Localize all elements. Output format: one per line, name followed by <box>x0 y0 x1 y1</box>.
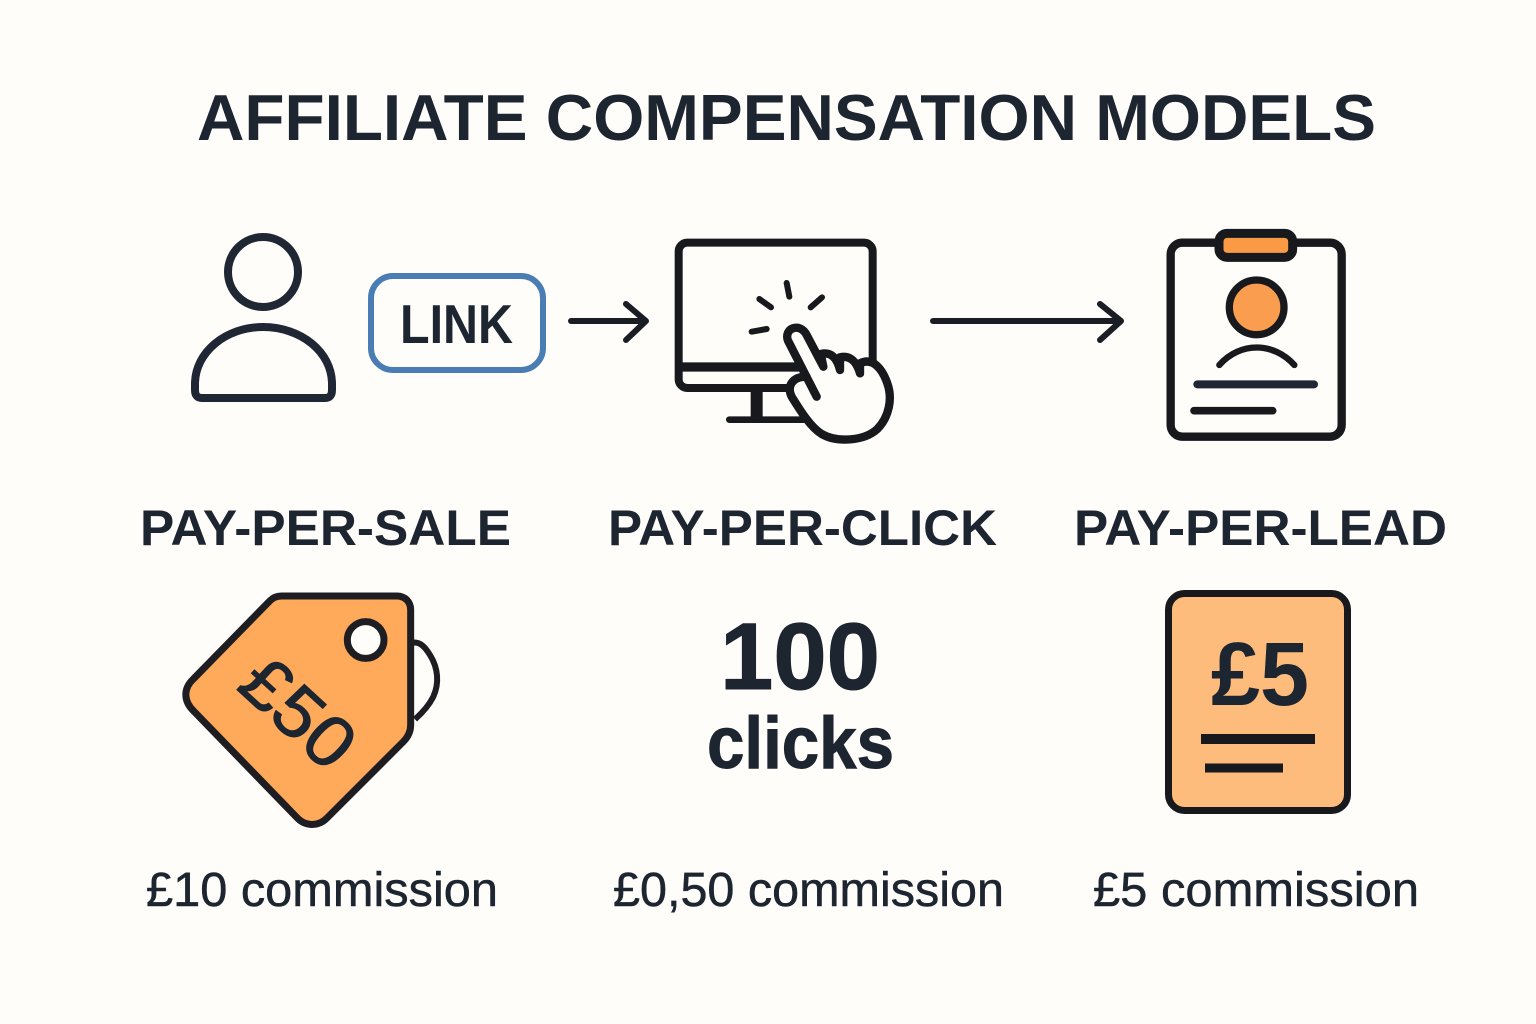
link button <box>371 276 543 370</box>
icon: monitor with clicking hand <box>679 243 890 440</box>
icon: clipboard with profile <box>1171 233 1342 437</box>
title: AFFILIATE COMPENSATION MODELS <box>197 81 1376 154</box>
arrow: click to lead <box>933 304 1121 340</box>
label: pay-per-sale: PAY-PER-SALE <box>140 500 511 556</box>
icon: person <box>195 237 332 398</box>
icon: £5 document <box>1168 594 1348 810</box>
commission: pay-per-click: £0,50 commission <box>613 864 1004 917</box>
link button: LINK <box>400 293 513 355</box>
stat: 100 clicks: clicks <box>707 703 894 784</box>
arrow: link to click <box>571 304 646 340</box>
commission: pay-per-lead: £5 commission <box>1093 864 1419 917</box>
icon: price tag: £50 <box>224 641 372 786</box>
icon: £5 document: £5 <box>1211 625 1309 725</box>
icon: price tag <box>186 596 437 824</box>
commission: pay-per-sale: £10 commission <box>146 864 498 917</box>
stat: 100 clicks: 100 <box>720 604 880 710</box>
label: pay-per-lead: PAY-PER-LEAD <box>1074 500 1447 556</box>
stat: 100 clicks <box>707 604 894 784</box>
label: pay-per-click: PAY-PER-CLICK <box>608 500 997 556</box>
